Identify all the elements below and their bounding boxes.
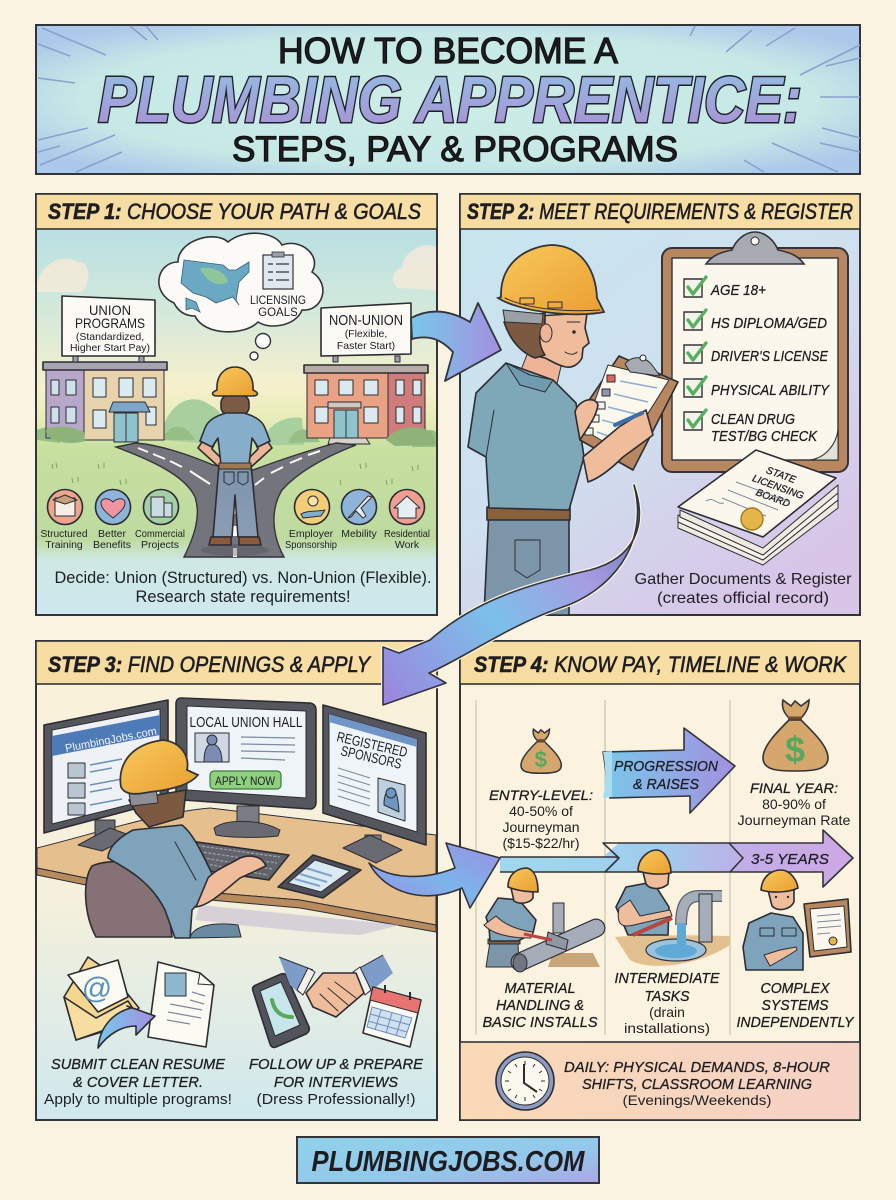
text: complex systems: SYSTEMS [762, 997, 828, 1014]
small clipboard [577, 355, 678, 470]
icon: resume [148, 962, 214, 1047]
icon: handshake [279, 955, 393, 1017]
text: step 1 summary: Decide: Union (Structured) vs. Non-Union (Flexible). [54, 569, 432, 587]
text: intermediate tasks: installations) [624, 1020, 710, 1036]
header: step 4 [460, 641, 860, 684]
icon: commercial projects [135, 490, 185, 551]
non-union benefit icons [285, 490, 430, 551]
daily demands band [460, 1042, 860, 1120]
checklist items: HS DIPLOMA/GED [711, 315, 827, 332]
title banner [36, 25, 860, 174]
icon: clock [496, 1052, 554, 1110]
text: gather documents [634, 571, 852, 607]
icon: submit arrow [98, 1006, 155, 1048]
worker at computer [86, 740, 266, 938]
text: daily demands: SHIFTS, CLASSROOM LEARNING [582, 1076, 812, 1093]
desk [37, 808, 436, 935]
heading line 3: STEPS, PAY & PROGRAMS [232, 130, 678, 169]
heading line 2: PLUMBING APPRENTICE: [98, 63, 802, 136]
forked road [116, 443, 356, 557]
monitor: plumbingjobs.com [44, 700, 168, 851]
text: submit resume: & COVER LETTER. [73, 1074, 203, 1091]
entry-level money bag [521, 729, 561, 773]
final year money bag: $ [785, 729, 805, 770]
non-union sign: Faster Start) [337, 340, 395, 352]
union programs sign: UNION [89, 302, 131, 318]
panel: step 4 pay and timeline [460, 641, 860, 1120]
monitor: local union hall: LOCAL UNION HALL [190, 715, 302, 731]
stack of licensing documents: STATE [765, 465, 797, 486]
text: step 1 summary: Research state requirements! [136, 588, 350, 606]
text: licensing goals: GOALS [258, 307, 298, 319]
text: entry level pay: Journeyman [502, 819, 580, 835]
thought cloud: licensing goals [159, 233, 323, 360]
text: submit resume: Apply to multiple programs! [44, 1091, 232, 1108]
checklist items [684, 277, 830, 445]
final year money bag [763, 700, 828, 771]
icon: commercial projects: Commercial [135, 528, 185, 540]
header: step 2 [460, 194, 860, 229]
footer: plumbingjobs.com: PLUMBINGJOBS.COM [312, 1146, 585, 1178]
text: entry level pay: 40-50% of [509, 803, 573, 819]
icon: calendar [363, 985, 421, 1047]
text: licensing goals: LICENSING [250, 295, 306, 307]
icon: commercial projects: Projects [141, 539, 179, 551]
icon: employer sponsorship: Employer [289, 528, 334, 540]
tablet [278, 855, 361, 898]
checklist items: TEST/BG CHECK [711, 428, 818, 445]
icon: better benefits [93, 490, 131, 551]
text: follow up: FOR INTERVIEWS [274, 1074, 398, 1091]
text: follow up: (Dress Professionally!) [256, 1091, 416, 1108]
header: step 1 [36, 194, 437, 229]
text: final year pay: 80-90% of [762, 796, 826, 812]
panel: step 1 choose your path [36, 194, 437, 615]
arrow: progression and raises: & RAISES [633, 776, 699, 793]
icon: envelope with email: @ [82, 972, 112, 1005]
worker 2: drain installation [615, 850, 730, 966]
text: final year pay [738, 780, 851, 828]
icon: residential work: Work [395, 539, 420, 551]
text: complex systems: INDEPENDENTLY [736, 1014, 854, 1031]
icon: better benefits: Benefits [93, 539, 131, 551]
text: complex systems [736, 980, 854, 1031]
worker 3: complex systems [743, 870, 851, 970]
monitor: registered sponsors [323, 705, 426, 863]
text: licensing goals [250, 295, 306, 319]
icon: structured training: Structured [40, 528, 88, 540]
icon: mobility plane: Mebility [341, 528, 378, 540]
icon: envelope with email [64, 957, 139, 1040]
arrow: progression and raises [603, 728, 735, 813]
worker with clipboard [468, 245, 678, 615]
checklist items: AGE 18+ [710, 282, 766, 299]
text: intermediate tasks: TASKS [644, 988, 690, 1005]
icon: goals clipboard [263, 252, 293, 289]
union programs sign: Higher Start Pay) [70, 342, 150, 354]
stack of licensing documents: BOARD [754, 487, 791, 510]
text: gather documents: (creates official record) [657, 590, 829, 607]
heading line 1: HOW TO BECOME A [278, 30, 618, 71]
checklist items: DRIVER'S LICENSE [711, 348, 829, 365]
panel: step 2 requirements [460, 194, 860, 615]
text: intermediate tasks: (drain [649, 1004, 685, 1020]
arrow: step 1 to step 2 [411, 303, 501, 381]
icon: residential work: Residential [384, 528, 430, 540]
timeline arrow: 3-5 years [500, 830, 853, 887]
text: follow up [249, 1056, 424, 1108]
non-union sign: NON-UNION [329, 313, 403, 329]
entry-level money bag: $ [535, 747, 548, 772]
text: entry level pay: ($15-$22/hr) [502, 835, 580, 851]
text: submit resume [44, 1056, 232, 1108]
text: step 1 summary [54, 569, 432, 606]
header: step 3 [36, 641, 437, 684]
keyboard [183, 840, 289, 880]
monitor: plumbingjobs.com: PlumbingJobs.com [64, 725, 158, 755]
left building [43, 362, 167, 443]
arrow: step 2 to step 3 [383, 485, 639, 705]
non-union sign: (Flexible, [345, 328, 387, 340]
text: entry level pay: ENTRY-LEVEL: [489, 787, 593, 803]
icon: phone [253, 974, 309, 1047]
monitor: local union hall: APPLY NOW [215, 774, 276, 788]
text: final year pay: Journeyman Rate [738, 812, 851, 828]
text: intermediate tasks [614, 970, 720, 1036]
header: step 4: STEP 4: KNOW PAY, TIMELINE & WORK [474, 652, 847, 677]
timeline arrow: 3-5 years: 3-5 YEARS [751, 851, 829, 868]
union programs sign: (Standardized, [76, 331, 144, 343]
footer: plumbingjobs.com [297, 1137, 599, 1183]
text: final year pay: FINAL YEAR: [750, 780, 838, 796]
arrow: step 3 to step 4 [369, 843, 500, 908]
icon: structured training: Training [45, 539, 83, 551]
icon: mobility plane [341, 490, 378, 540]
large requirements clipboard [662, 232, 848, 472]
background clouds and hills [37, 245, 436, 485]
text: material handling: BASIC INSTALLS [482, 1014, 598, 1031]
monitor: local union hall [176, 698, 316, 837]
icon: employer sponsorship [285, 490, 337, 551]
text: daily demands: DAILY: PHYSICAL DEMANDS, 8-HOUR [564, 1059, 830, 1076]
header: step 1: STEP 1: CHOOSE YOUR PATH & GOALS [48, 199, 421, 224]
text: material handling: MATERIAL [504, 980, 576, 997]
text: follow up: FOLLOW UP & PREPARE [249, 1056, 424, 1073]
text: daily demands [564, 1059, 830, 1108]
header: step 3: STEP 3: FIND OPENINGS & APPLY [48, 652, 371, 677]
text: gather documents: Gather Documents & Register [634, 571, 852, 588]
worker from behind at crossroads [198, 367, 272, 556]
icon: employer sponsorship: Sponsorship [285, 539, 337, 551]
text: material handling [482, 980, 598, 1031]
right building [304, 365, 436, 446]
checklist items: PHYSICAL ABILITY [711, 382, 830, 399]
panel: step 3 find openings [36, 641, 437, 1120]
monitor: registered sponsors: REGISTERED [335, 728, 409, 760]
text: material handling: HANDLING & [496, 997, 584, 1014]
stack of licensing documents [678, 450, 838, 565]
text: intermediate tasks: INTERMEDIATE [614, 970, 720, 987]
union programs sign: PROGRAMS [75, 315, 145, 331]
icon: better benefits: Better [98, 528, 127, 540]
icon: residential work [384, 490, 430, 551]
union benefit icons [40, 490, 185, 551]
non-union sign [321, 303, 411, 362]
monitor: registered sponsors: SPONSORS [339, 742, 403, 772]
arrow: progression and raises: PROGRESSION [614, 758, 718, 775]
text: entry level pay [489, 787, 593, 851]
icon: US map [181, 260, 249, 312]
union programs sign [62, 296, 155, 362]
worker 1: material handling [484, 868, 600, 972]
checklist items: CLEAN DRUG [711, 411, 795, 428]
stack of licensing documents: LICENSING [751, 473, 805, 502]
icon: structured training [40, 490, 88, 551]
text: submit resume: SUBMIT CLEAN RESUME [51, 1056, 226, 1073]
text: daily demands: (Evenings/Weekends) [622, 1092, 772, 1108]
text: complex systems: COMPLEX [760, 980, 830, 997]
